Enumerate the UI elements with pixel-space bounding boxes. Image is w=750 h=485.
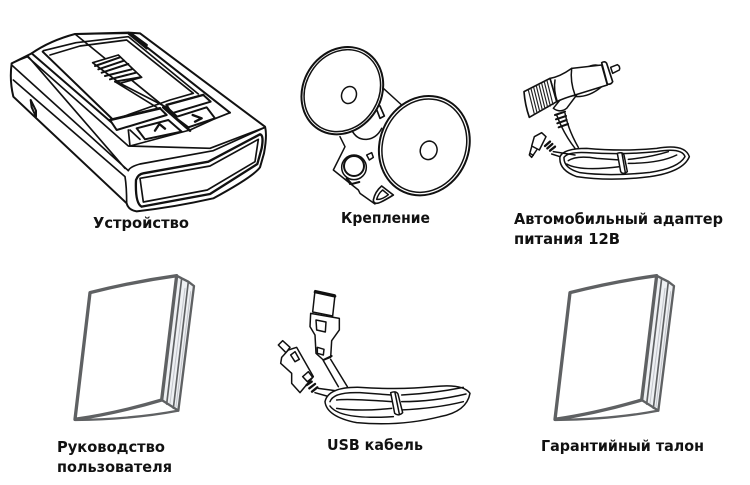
panel: USB cable xyxy=(278,291,470,454)
panel: warranty card xyxy=(541,276,704,455)
icon: car adapter with coiled cable xyxy=(524,62,689,179)
label: manual second line: пользователя xyxy=(57,458,172,476)
label: device: Устройство xyxy=(93,214,189,232)
panel: device xyxy=(11,33,266,232)
icon: booklet xyxy=(75,276,194,420)
label: manual: Руководство xyxy=(57,438,165,456)
label: mount: Крепление xyxy=(341,209,430,227)
label: adapter: Автомобильный адаптер xyxy=(514,210,723,228)
label: warranty card: Гарантийный талон xyxy=(541,437,704,455)
panel: car power adapter xyxy=(514,62,723,248)
label: adapter second line: питания 12В xyxy=(514,230,620,248)
icon: radar detector device xyxy=(11,33,266,211)
panel: mount xyxy=(285,32,485,227)
icon: booklet xyxy=(555,276,674,420)
icon: suction cup mount xyxy=(285,32,485,210)
label: USB cable: USB кабель xyxy=(327,436,423,454)
panel: user manual xyxy=(57,276,194,476)
icon: USB cable xyxy=(278,291,470,424)
